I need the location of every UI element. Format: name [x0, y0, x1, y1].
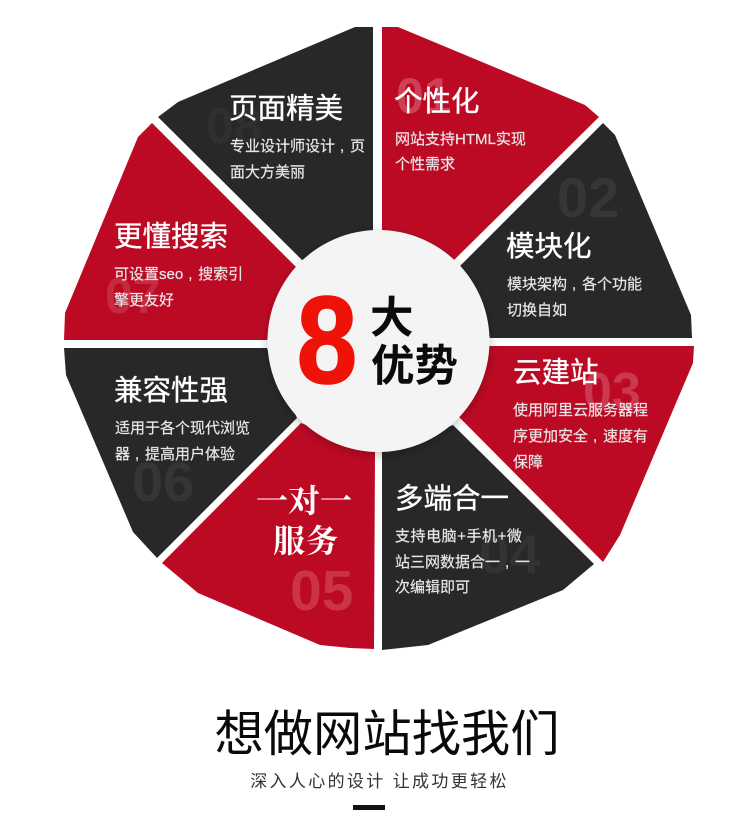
number 07: 07 [105, 268, 161, 324]
center circle [268, 230, 490, 452]
description: 多端合一: 支持电脑+手机+微 [395, 528, 522, 545]
description: 多端合一: 次编辑即可 [395, 579, 470, 596]
panel: 模块化 [460, 123, 692, 338]
description: 云建站: 序更加安全 , 速度有 [513, 428, 648, 445]
description: 更懂搜索: 可设置seo , 搜索引 [114, 266, 243, 283]
description: 云建站: 使用阿里云服务器程 [513, 402, 648, 419]
heading: 页面精美: 页面精美 [229, 93, 343, 125]
description: 云建站: 保障 [513, 453, 543, 471]
number 08: 08 [206, 98, 262, 154]
description: 更懂搜索: 擎更友好 [114, 292, 174, 309]
number 03: 03 [583, 363, 641, 421]
number 05: 05 [290, 559, 353, 623]
description: 页面精美: 面大方美丽 [230, 164, 305, 181]
heading: 大优势: 大 [370, 295, 414, 343]
number 06: 06 [132, 450, 194, 513]
panel: 多端合一 [382, 425, 594, 650]
panel: 一对一服务 [162, 423, 375, 649]
heading: 更懂搜索: 更懂搜索 [114, 221, 228, 253]
description: 个性化: 网站支持HTML实现 [395, 131, 526, 148]
number 01: 01 [396, 68, 452, 124]
description: 页面精美: 专业设计师设计 , 页 [230, 138, 365, 155]
description: 模块化: 切换自如 [507, 302, 567, 319]
description: 兼容性强: 适用于各个现代浏览 [115, 420, 250, 437]
description: 多端合一: 站三网数据合一 , 一 [395, 554, 530, 571]
panel: 兼容性强 [64, 348, 297, 558]
heading: 兼容性强: 兼容性强 [114, 375, 228, 407]
panel: 页面精美 [158, 27, 373, 260]
panel: 个性化 [382, 27, 599, 260]
number 02: 02 [557, 166, 619, 229]
number 04: 04 [479, 523, 541, 585]
big red number 8: 8 [297, 270, 357, 410]
heading: 一对一服务: 一对一 [256, 476, 352, 522]
footer title: 想做网站找我们 [214, 707, 560, 762]
description: 个性化: 个性需求 [395, 156, 455, 173]
footer subtitle: 深入人心的设计 让成功更轻松 [250, 772, 509, 791]
description: 兼容性强: 器 , 提高用户体验 [115, 446, 235, 463]
heading: 模块化: 模块化 [506, 231, 592, 263]
panel: 更懂搜索 [64, 123, 296, 340]
heading: 云建站: 云建站 [513, 357, 599, 389]
footer bar [353, 805, 385, 810]
heading: 个性化: 个性化 [394, 86, 480, 118]
heading: 一对一服务: 服务 [273, 516, 339, 562]
description: 模块化: 模块架构 , 各个功能 [507, 276, 642, 293]
heading: 多端合一: 多端合一 [395, 483, 509, 515]
panel: 云建站 [459, 346, 694, 562]
heading: 大优势: 优势 [371, 343, 458, 391]
